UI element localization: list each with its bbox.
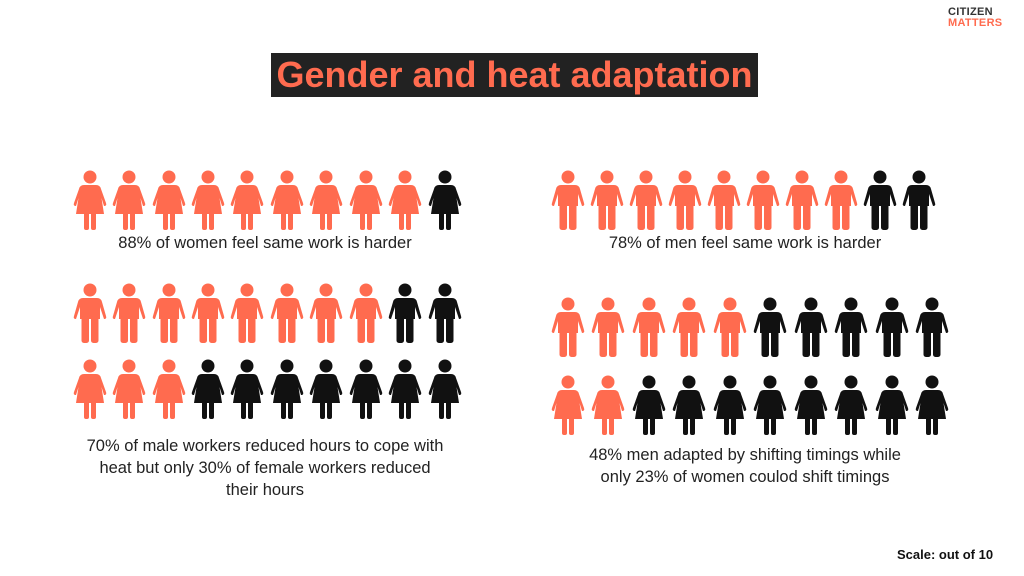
caption: men 78%: 78% of men feel same work is harder — [609, 234, 881, 252]
caption: reduced hours: 70% of male workers reduced hours to cope with — [87, 437, 443, 455]
row: women reduced hours — [74, 360, 461, 419]
logo: CITIZEN — [948, 6, 993, 18]
caption: women 88%: 88% of women feel same work is harder — [118, 234, 412, 252]
logo: MATTERS — [948, 17, 1002, 29]
row: women shifted timings — [552, 376, 948, 435]
caption: shift timings — [589, 446, 901, 486]
caption: reduced hours: their hours — [226, 481, 304, 499]
row: women 88% — [74, 170, 461, 230]
caption: shift timings: 48% men adapted by shifting timings while — [589, 446, 901, 464]
row: men 78% — [552, 170, 935, 230]
caption: reduced hours — [87, 437, 443, 499]
row: men shifted timings — [552, 298, 948, 357]
caption: shift timings: only 23% of women coulod shift timings — [601, 468, 889, 486]
logo — [948, 6, 1002, 29]
caption: reduced hours: heat but only 30% of female workers reduced — [99, 459, 431, 477]
scale note: Scale: out of 10 — [897, 547, 993, 562]
title: Gender and heat adaptation — [276, 54, 753, 95]
row: men reduced hours 80% — [74, 284, 461, 343]
